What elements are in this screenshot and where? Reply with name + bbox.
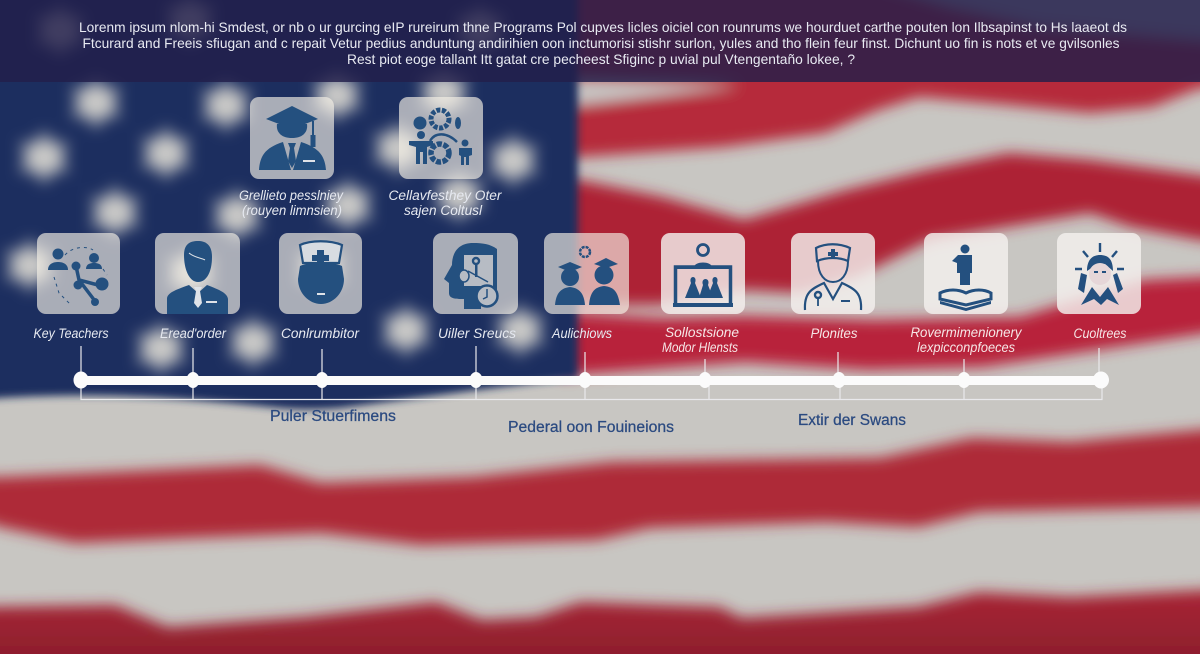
label: nurses: Plonites <box>810 326 858 341</box>
label: top card 1: (rouyen limnsien) <box>242 203 342 218</box>
icon card: person on book <box>924 233 1008 314</box>
label: audiences: Aulichiows <box>551 326 612 341</box>
icon card: audience <box>544 233 629 314</box>
label: user services: Uiller Sreucs <box>438 326 516 341</box>
label: top card 2: Cellavfesthey Oter <box>388 188 502 203</box>
label: top card 2: sajen Coltusl <box>404 203 483 218</box>
label: government <box>910 325 1023 355</box>
label: contributor: Conlrumbitor <box>281 326 360 341</box>
label: classroom: Modor Hlensts <box>662 340 738 355</box>
label: government: Rovermimenionery <box>910 325 1023 340</box>
flag canton <box>0 0 578 409</box>
icon card: gears and people <box>399 97 483 179</box>
label: government: lexpicconpfoeces <box>917 340 1015 355</box>
icon card: woman with rays <box>1057 233 1141 314</box>
icon card: nurse <box>791 233 875 314</box>
icon card: officer <box>155 233 240 314</box>
icon card: graduate <box>250 97 334 179</box>
header text: Lorenm ipsum nlom-hi Smdest, or nb o ur gurcing eIP rureirum thne Programs Pol cupves licles oiciel con rounrums we hourduet carthe pouten lon Ilbsapinst to Hs laaeot ds <box>79 19 1127 35</box>
header text <box>79 19 1127 67</box>
group label: centre: Pederal oon Fouineions <box>508 419 674 436</box>
icon card: key teachers network <box>37 233 120 314</box>
label: classroom: Sollostsione <box>665 325 739 340</box>
label: colleagues: Cuoltrees <box>1074 326 1127 341</box>
timeline <box>74 346 1109 400</box>
group label: left: Puler Stuerfimens <box>270 408 396 425</box>
header panel <box>0 0 1200 82</box>
label: officer: Eread'order <box>160 326 226 341</box>
group label: right: Extir der Swans <box>798 412 906 429</box>
icon card: head and clock <box>433 233 518 314</box>
icon card: classroom board <box>661 233 745 314</box>
label: top card 2 <box>388 188 502 218</box>
label: classroom <box>662 325 739 355</box>
label: top card 1: Grellieto pesslniey <box>239 188 344 203</box>
header text: Ftcurard and Freeis sfiugan and c repait Vetur pedius anduntung andirihien oon inctumorisi stishr surlon, yules and tho flein feur finst. Dichunt uo fin is nots et ve gvilsonles <box>82 35 1120 51</box>
label: key teachers: Key Teachers <box>34 326 109 341</box>
icon card: nurse head <box>279 233 362 314</box>
label: top card 1 <box>239 188 344 218</box>
header text: Rest piot eoge tallant Itt gatat cre pecheest Sfiginc p uvial pul Vtengentaño lokee, ? <box>347 51 855 67</box>
